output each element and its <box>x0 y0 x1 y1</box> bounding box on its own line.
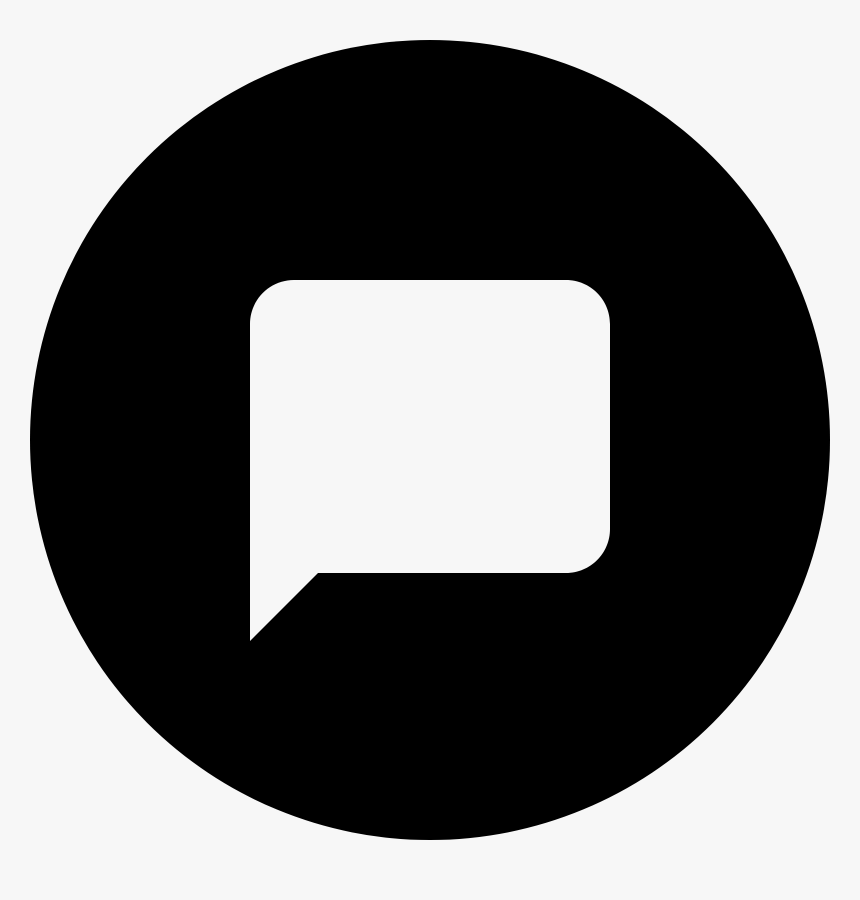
icon: speech bubble <box>250 280 610 641</box>
